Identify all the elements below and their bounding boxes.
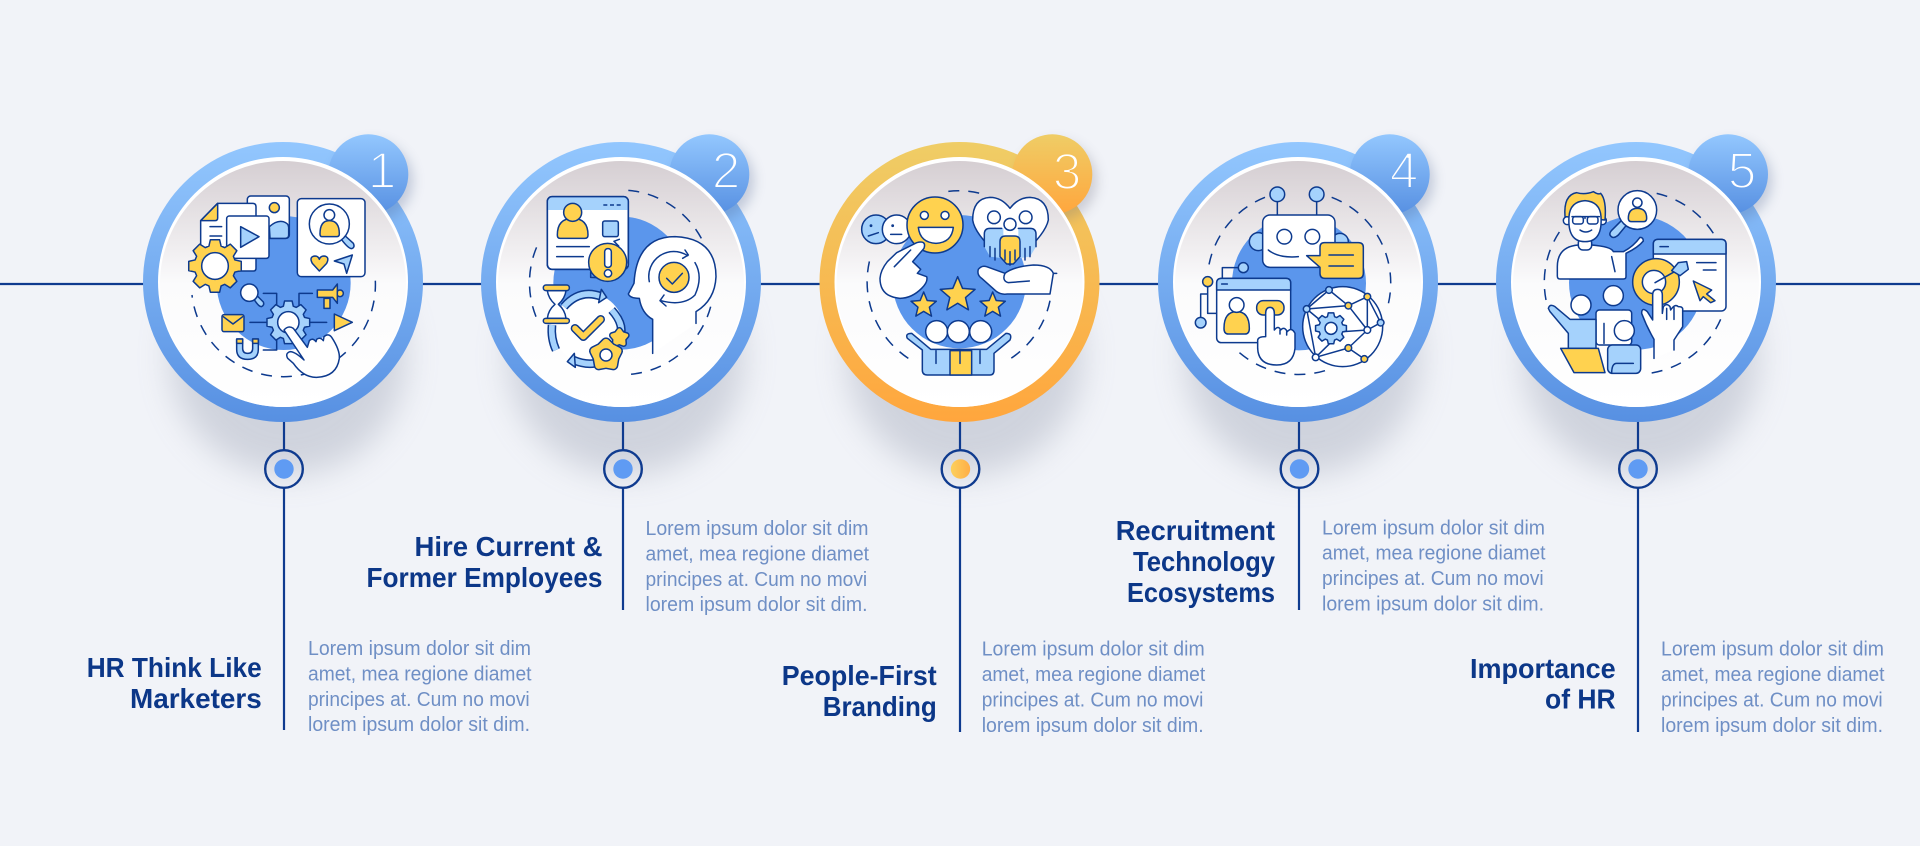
heading (87, 652, 262, 714)
icon: marketing tools (189, 196, 375, 377)
step 1: HR Think Like Marketers (87, 134, 532, 736)
description: principes at. Cum no movi (308, 689, 530, 711)
icon: importance of HR (1544, 191, 1726, 374)
description: amet, mea regione diamet (1661, 664, 1885, 686)
step 5: Importance of HR (1470, 134, 1885, 737)
inner disc (496, 157, 746, 407)
description: principes at. Cum no movi (1322, 568, 1544, 590)
description: principes at. Cum no movi (1661, 690, 1883, 712)
number badge: 1 (368, 142, 396, 199)
ring (1158, 142, 1438, 422)
heading: Former Employees (366, 562, 602, 593)
step 3: People-First Branding (782, 134, 1206, 737)
heading: Branding (823, 691, 937, 722)
description: amet, mea regione diamet (308, 664, 532, 686)
description: Lorem ipsum dolor sit dim (982, 639, 1205, 661)
icon: rehiring employees (529, 190, 716, 375)
description (982, 639, 1206, 737)
ring (820, 142, 1100, 422)
heading: Importance (1470, 653, 1616, 684)
number badge (669, 134, 754, 221)
step 4: Recruitment Technology Ecosystems (1116, 134, 1546, 615)
description (646, 518, 869, 616)
step 2: Hire Current and Former Employees (366, 134, 869, 616)
ring (143, 142, 423, 422)
connector stem and marker (942, 420, 979, 732)
heading: Technology (1133, 546, 1275, 577)
number badge (1350, 134, 1434, 221)
description: amet, mea regione diamet (646, 544, 869, 566)
drop shadow (847, 239, 1083, 475)
description: principes at. Cum no movi (646, 569, 867, 591)
heading (782, 660, 937, 722)
heading: People-First (782, 660, 937, 691)
horizontal timeline line (0, 283, 1920, 285)
drop shadow (1185, 239, 1421, 475)
drop shadow (170, 239, 406, 475)
description: lorem ipsum dolor sit dim. (308, 714, 530, 736)
description: lorem ipsum dolor sit dim. (646, 594, 868, 616)
heading: Marketers (130, 683, 262, 714)
icon: recruitment technology (1195, 187, 1391, 374)
inner disc (1511, 157, 1761, 407)
description: Lorem ipsum dolor sit dim (646, 518, 868, 540)
heading: HR Think Like (87, 652, 262, 683)
drop shadow (508, 239, 744, 475)
number badge: 3 (1053, 143, 1081, 200)
description: principes at. Cum no movi (982, 690, 1203, 712)
heading (1470, 653, 1616, 714)
description: amet, mea regione diamet (982, 664, 1206, 686)
description: Lorem ipsum dolor sit dim (1661, 639, 1884, 661)
number badge (328, 134, 413, 221)
number badge: 5 (1728, 142, 1756, 199)
description (1322, 517, 1546, 615)
inner disc (1173, 157, 1423, 407)
description: Lorem ipsum dolor sit dim (308, 638, 531, 660)
inner disc (158, 157, 408, 407)
number badge: 2 (712, 142, 740, 199)
description: lorem ipsum dolor sit dim. (1322, 593, 1544, 615)
heading: Ecosystems (1127, 577, 1275, 608)
description (308, 638, 532, 736)
description: amet, mea regione diamet (1322, 543, 1546, 565)
connector stem and marker (265, 420, 303, 730)
inner disc (834, 157, 1084, 407)
number badge (1688, 134, 1772, 221)
connector stem and marker (1281, 420, 1318, 610)
number badge (1012, 134, 1097, 221)
heading (1116, 515, 1275, 608)
heading: Hire Current & (414, 531, 602, 562)
ring (1496, 142, 1776, 422)
description: lorem ipsum dolor sit dim. (1661, 715, 1883, 737)
description: Lorem ipsum dolor sit dim (1322, 517, 1545, 539)
connector stem and marker (1619, 420, 1657, 732)
description: lorem ipsum dolor sit dim. (982, 715, 1204, 737)
ring (481, 142, 761, 422)
drop shadow (1523, 239, 1759, 475)
number badge: 4 (1390, 142, 1418, 199)
heading: of HR (1545, 683, 1616, 714)
connector stem and marker (604, 420, 642, 610)
heading: Recruitment (1116, 515, 1275, 546)
description (1661, 639, 1885, 737)
icon: people first branding (862, 191, 1057, 375)
heading (366, 531, 602, 593)
